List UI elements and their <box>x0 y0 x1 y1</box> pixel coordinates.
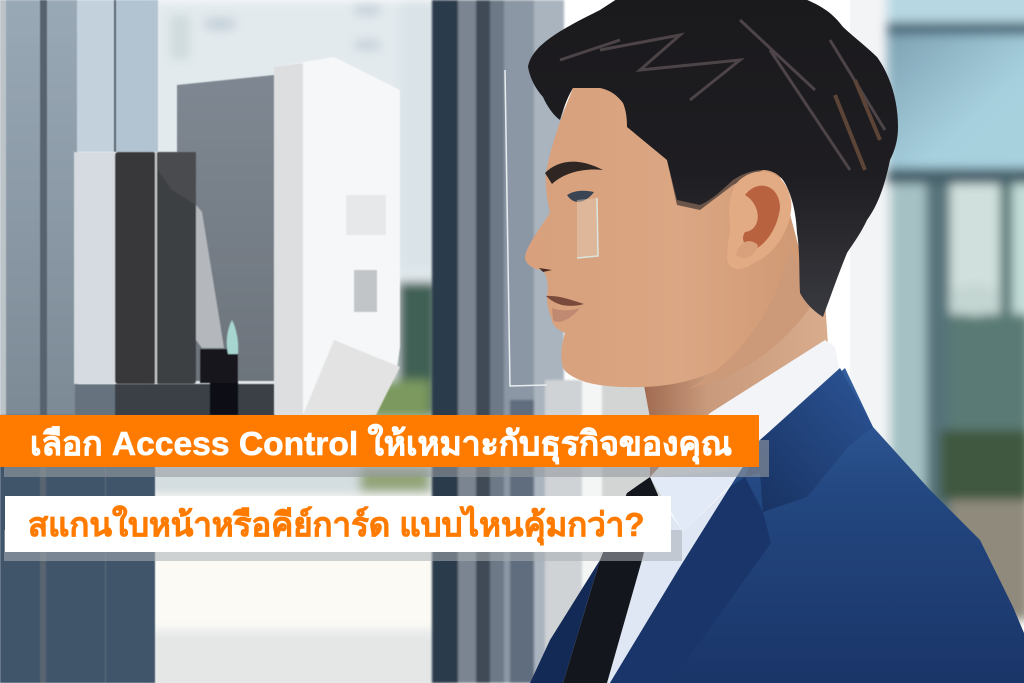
man: ear <box>727 171 791 269</box>
access control terminal <box>74 57 400 415</box>
man: temple fade <box>627 105 775 210</box>
dark door frame in the centre <box>432 0 662 683</box>
banner shadow: white subheading <box>4 530 682 561</box>
background right: green-tinted building <box>850 0 1024 683</box>
window frame on the left <box>0 0 275 683</box>
man: hair <box>528 0 898 317</box>
heading text: เลือก Access Control ให้เหมาะกับธุรกิจของคุณ <box>30 426 732 463</box>
man: white shirt <box>605 340 840 683</box>
subheading banner: white <box>5 496 671 552</box>
man: navy tie <box>563 477 658 683</box>
man: navy suit <box>530 368 1024 683</box>
man: neck and face <box>525 88 828 478</box>
banner shadow: orange heading <box>4 440 769 477</box>
background: lobby through glass <box>150 0 440 683</box>
scanner glass overlay <box>505 70 598 386</box>
heading banner: orange <box>0 415 759 467</box>
man: facial features <box>539 162 603 322</box>
subheading text: สแกนใบหน้าหรือคีย์การ์ด แบบไหนคุ้มกว่า? <box>28 506 644 543</box>
